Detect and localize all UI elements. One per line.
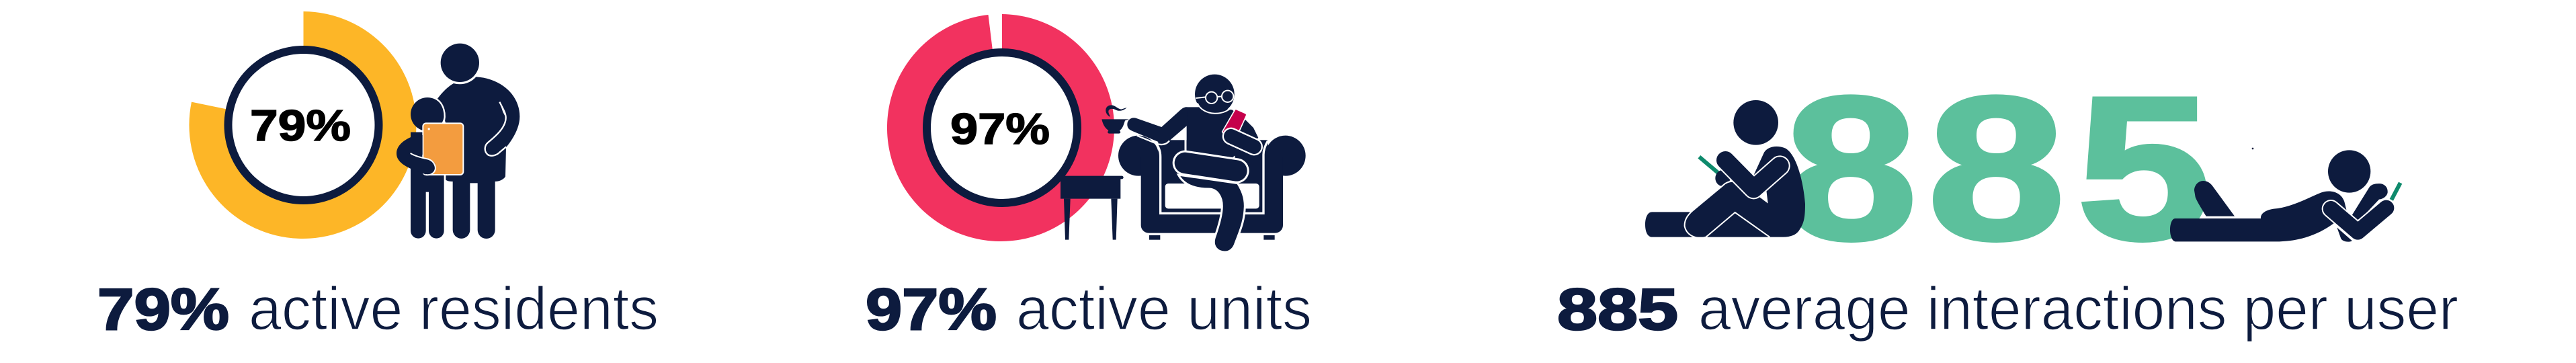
icon: side table <box>1061 176 1124 240</box>
big number 885: 5 <box>2077 55 2211 282</box>
big number 885: 8 <box>1927 55 2065 282</box>
donut chart: 97%: 97% <box>950 104 1050 153</box>
label: 885 average interactions per user: average interactions per user <box>1698 276 2458 343</box>
big number 885: 8 <box>1784 55 1917 282</box>
panel: active residents <box>97 11 659 343</box>
panel: average interactions per user <box>1557 55 2458 343</box>
icon: seated person with phone <box>1645 100 1805 238</box>
label: 97% active units: active units <box>1016 276 1312 343</box>
donut chart: 79%: 79% <box>250 101 351 150</box>
panel: active units <box>866 14 1312 343</box>
icon: adult and child with tablet <box>397 44 520 239</box>
label: 97% active units <box>866 276 1312 343</box>
donut chart: 79% <box>189 11 416 239</box>
label: 885 average interactions per user: 885 <box>1557 277 1678 342</box>
donut chart: 97% <box>887 14 1114 241</box>
label: 97% active units: 97% <box>866 277 997 342</box>
icon: person on sofa with phone and cup <box>1102 75 1306 252</box>
icon: reclining person with phone <box>2170 148 2401 242</box>
label: 79% active residents: 79% <box>97 277 229 342</box>
label: 79% active residents: active residents <box>249 276 659 343</box>
big number 885 <box>1784 55 2211 282</box>
